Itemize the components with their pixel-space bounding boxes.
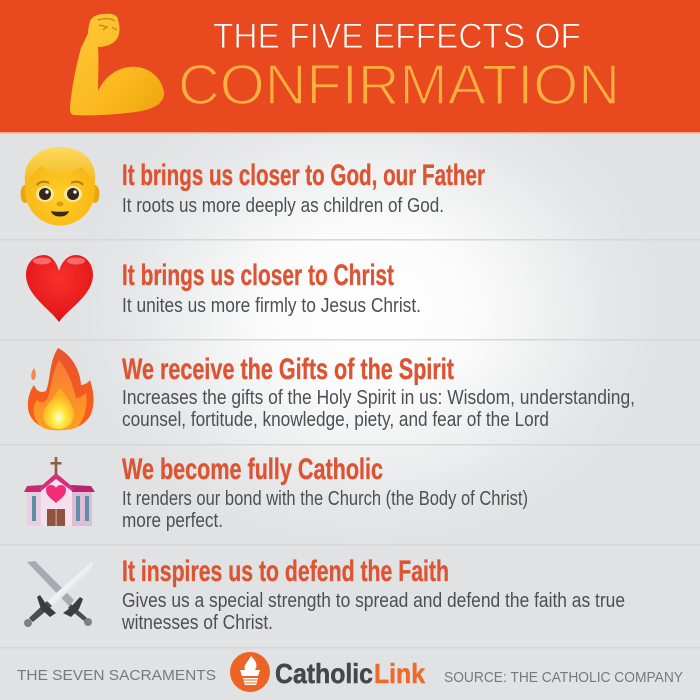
heading: It inspires us to defend the Faith <box>122 555 449 588</box>
panel: effect 1 <box>20 147 485 226</box>
title line 1: THE FIVE EFFECTS OF <box>213 17 581 56</box>
source: SOURCE: THE CATHOLIC COMPANY <box>444 670 683 686</box>
description: counsel, fortitude, knowledge, piety, and fear of the Lord <box>122 409 549 431</box>
title line 2: CONFIRMATION <box>178 53 620 117</box>
logo: Catholic Link <box>230 652 425 692</box>
description: It roots us more deeply as children of God. <box>122 195 444 217</box>
icon: wedding church <box>24 457 95 526</box>
description: more perfect. <box>122 510 223 532</box>
logo: Catholic Link: Link <box>374 658 425 689</box>
icon: flexed biceps <box>70 14 164 115</box>
icon: fire <box>28 348 94 430</box>
logo: Catholic Link: Catholic <box>275 658 373 689</box>
description <box>122 488 528 532</box>
description: Increases the gifts of the Holy Spirit in us: Wisdom, understanding, <box>122 387 635 409</box>
panel: effect 5 <box>24 555 625 634</box>
description <box>121 590 625 634</box>
icon: boy face <box>20 147 100 226</box>
heading: It brings us closer to God, our Father <box>122 159 485 192</box>
description: witnesses of Christ. <box>121 612 273 634</box>
description: It renders our bond with the Church (the Body of Christ) <box>122 488 528 510</box>
dividers <box>0 239 700 648</box>
heading: We receive the Gifts of the Spirit <box>122 353 454 386</box>
panel: effect 3 <box>28 348 635 431</box>
icon: red heart <box>26 255 93 322</box>
panel: footer <box>17 652 683 692</box>
panel: header <box>0 0 700 134</box>
panel: effect 2 <box>26 255 421 322</box>
description: It unites us more firmly to Jesus Christ. <box>122 295 421 317</box>
panel: effect 4 <box>24 453 528 532</box>
heading: It brings us closer to Christ <box>122 259 394 292</box>
description: Gives us a special strength to spread and defend the faith as true <box>122 590 625 612</box>
heading: We become fully Catholic <box>122 453 383 486</box>
icon: crossed swords <box>24 561 93 627</box>
description <box>122 387 635 431</box>
series label: THE SEVEN SACRAMENTS <box>17 668 216 684</box>
